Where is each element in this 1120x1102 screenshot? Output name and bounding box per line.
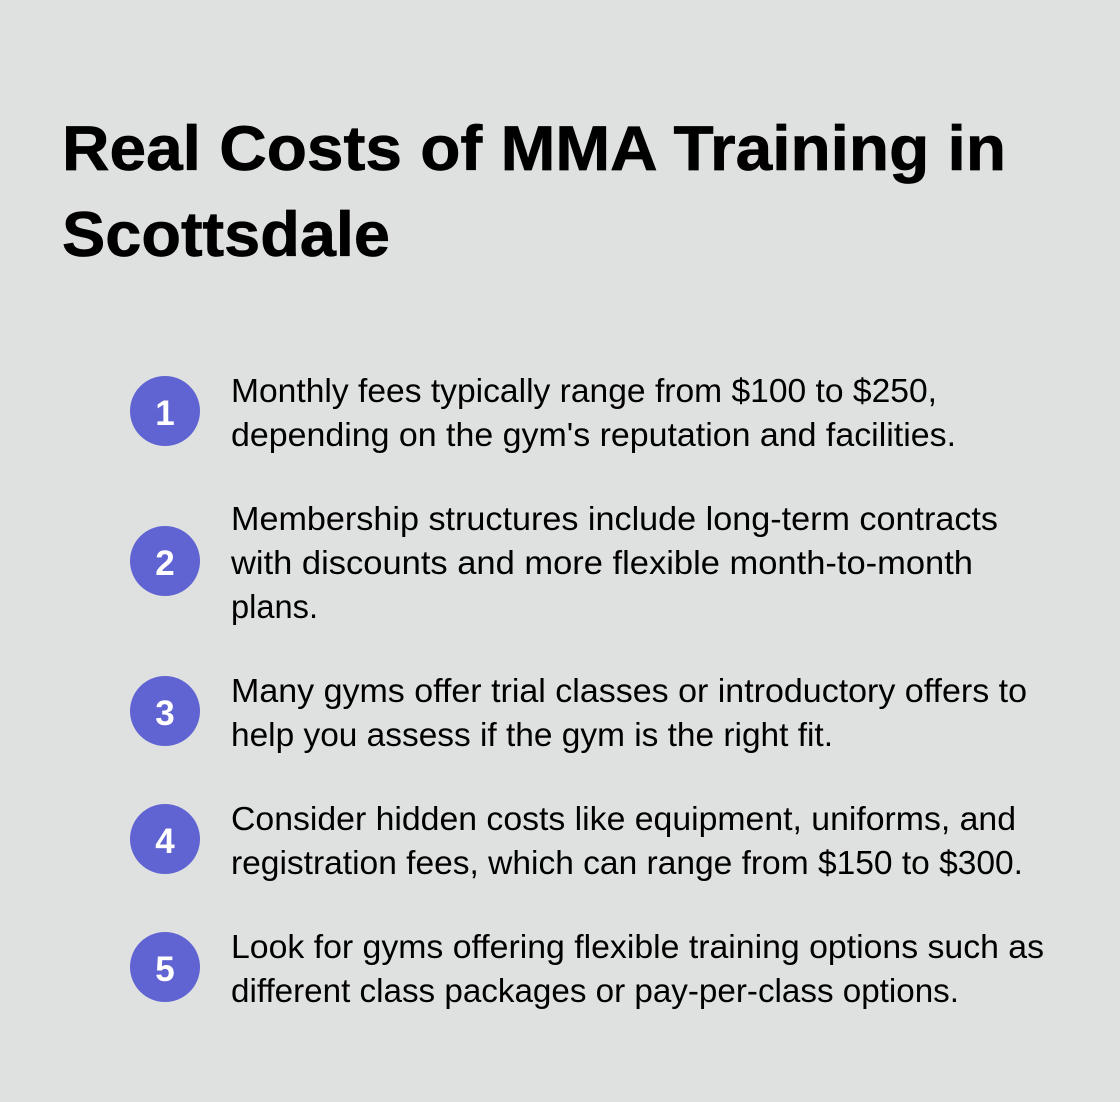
icon: number badge 1: 1: [155, 394, 175, 433]
text: monthly fees: depending on the gym's reputation and facilities.: [231, 416, 956, 453]
text: hidden costs: [231, 800, 1023, 881]
text: flexible options: [231, 928, 1044, 1009]
icon: number badge 4: [130, 804, 200, 874]
text: flexible options: different class packages or pay-per-class options.: [231, 972, 959, 1009]
icon: number badge 5: 5: [155, 950, 175, 989]
title: Real Costs of MMA Training in: [62, 114, 1006, 184]
text: hidden costs: registration fees, which can range from $150 to $300.: [231, 844, 1023, 881]
icon: number badge 3: 3: [155, 694, 175, 733]
title: Scottsdale: [62, 200, 390, 270]
icon: number badge 4: 4: [155, 822, 175, 861]
text: trial classes: [231, 672, 1027, 753]
title: [62, 114, 1006, 270]
text: monthly fees: Monthly fees typically range from $100 to $250,: [231, 372, 937, 409]
icon: number badge 1: [130, 376, 200, 446]
text: membership structures: plans.: [231, 588, 318, 625]
text: trial classes: Many gyms offer trial classes or introductory offers to: [231, 672, 1027, 709]
list item 2: [130, 500, 998, 625]
list item 1: [130, 372, 956, 453]
text: hidden costs: Consider hidden costs like equipment, uniforms, and: [231, 800, 1016, 837]
list item 3: [130, 672, 1027, 753]
icon: number badge 3: [130, 676, 200, 746]
icon: number badge 2: 2: [155, 544, 175, 583]
text: flexible options: Look for gyms offering flexible training options such as: [231, 928, 1044, 965]
text: monthly fees: [231, 372, 956, 453]
icon: number badge 5: [130, 932, 200, 1002]
text: membership structures: with discounts and more flexible month-to-month: [230, 544, 973, 581]
icon: number badge 2: [130, 526, 200, 596]
list item 5: [130, 928, 1044, 1009]
list item 4: [130, 800, 1023, 881]
text: trial classes: help you assess if the gym is the right fit.: [231, 716, 833, 753]
text: membership structures: Membership structures include long-term contracts: [231, 500, 998, 537]
text: membership structures: [230, 500, 998, 625]
